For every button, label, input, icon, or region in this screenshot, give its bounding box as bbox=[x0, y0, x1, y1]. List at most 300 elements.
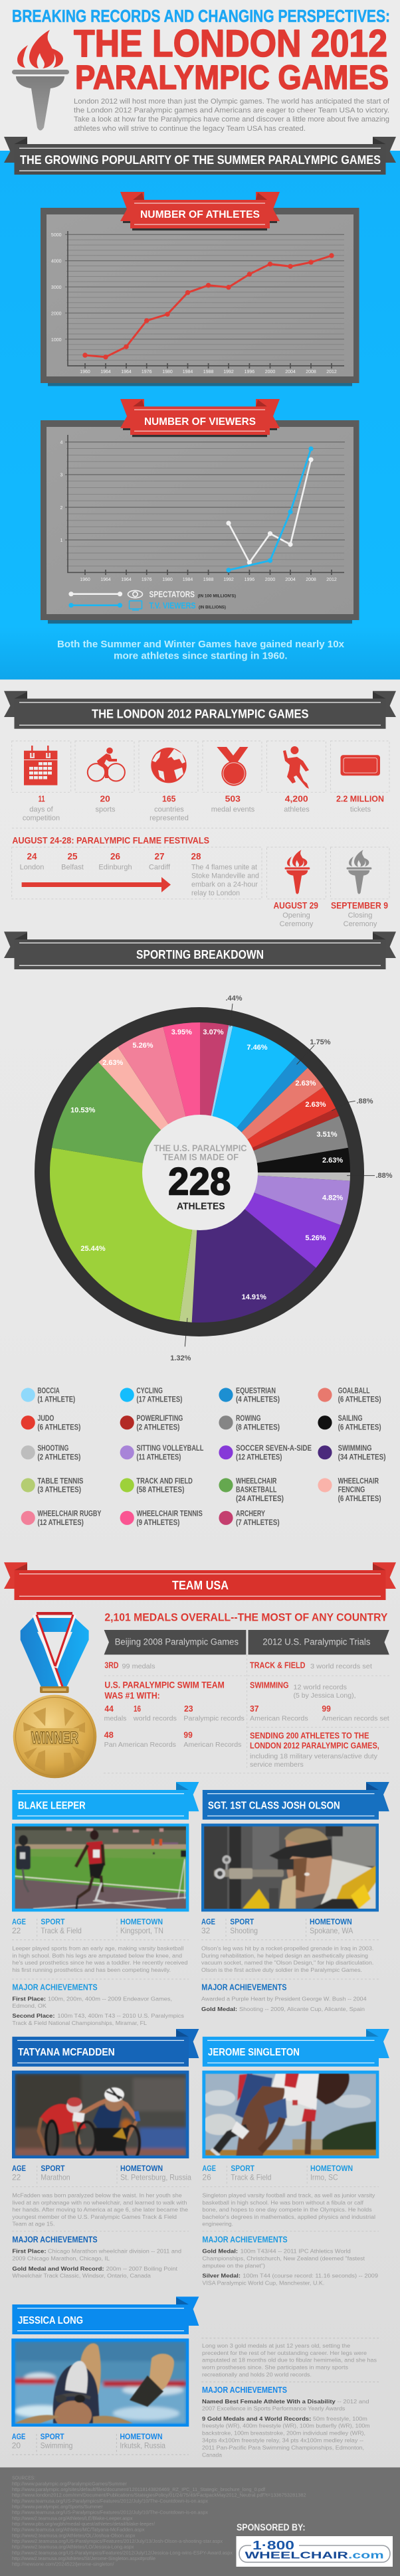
sources bbox=[12, 2475, 306, 2567]
legend labels: (4 ATHLETES) bbox=[236, 1396, 280, 1404]
sources: http://www2.teamusa.org/Athletes/LE/Blake-Leeper.aspx bbox=[12, 2515, 133, 2521]
trials results: 12 world records bbox=[294, 1684, 347, 1691]
growth caption: Both the Summer and Winter Games have gained nearly 10x bbox=[57, 639, 345, 650]
vital stats: Spokane, WA bbox=[310, 1926, 353, 1935]
stat: countries: countries bbox=[154, 806, 184, 814]
icon: gray torch bbox=[347, 850, 371, 894]
biography: Olson's leg was hit by a rocket-propelled grenade in Iraq in 2003. bbox=[201, 1945, 373, 1951]
name ribbon: TATYANA MCFADDEN bbox=[18, 2047, 115, 2058]
trials results: including 18 military veterans/active duty bbox=[250, 1753, 378, 1760]
major achievements: Championships, Christchurch, New Zealand (deemed "fastest bbox=[202, 2255, 365, 2261]
x axis labels: 1976 bbox=[142, 578, 152, 582]
x axis labels: 2012 bbox=[326, 370, 337, 374]
closing ceremony: SEPTEMBER 9 bbox=[331, 900, 388, 910]
biography: recreationally and holds 20 world records. bbox=[202, 2371, 312, 2377]
y axis labels: 5000 bbox=[51, 233, 62, 238]
biography: worn prostheses since. She participates in many sports bbox=[201, 2364, 349, 2370]
opening ceremony bbox=[267, 847, 326, 928]
callouts: 1.32% bbox=[170, 1354, 191, 1362]
biography: bachelor's degrees in mathematics, applied physics and industrial bbox=[202, 2214, 375, 2220]
legend labels: (12 ATHLETES) bbox=[37, 1519, 84, 1527]
vital stats bbox=[12, 2432, 189, 2455]
photo: sprinter on track bbox=[12, 1824, 189, 1913]
spectators line bbox=[226, 457, 314, 565]
legend labels: (1 ATHLETE) bbox=[37, 1396, 75, 1404]
vital stats: HOMETOWN bbox=[120, 2432, 162, 2441]
sponsor logo: .com bbox=[348, 2549, 384, 2561]
y axis labels: 4 bbox=[60, 441, 63, 445]
x axis labels bbox=[80, 370, 337, 374]
vital stats: St. Petersburg, Russia bbox=[120, 2173, 191, 2182]
name ribbon: BLAKE LEEPER bbox=[18, 1801, 86, 1812]
icon: gold medal bbox=[13, 1612, 96, 1778]
major achievements: Silver Medal: bbox=[202, 2273, 241, 2279]
major achievements: Second Place: bbox=[12, 2012, 55, 2019]
stat: countries bbox=[150, 748, 189, 823]
slice percentages: 2.63% bbox=[305, 1101, 326, 1109]
major achievements: VISA Paralympic World Cup, Manchester, U.K. bbox=[202, 2280, 324, 2287]
vital stats: SPORT bbox=[41, 2432, 64, 2441]
legend swatches bbox=[21, 1388, 332, 1525]
flames unite text bbox=[191, 863, 259, 897]
trials results: LONDON 2012 PARALYMPIC GAMES, bbox=[250, 1740, 379, 1750]
legend labels: SAILING bbox=[338, 1415, 363, 1423]
tab: beijing 2008 bbox=[104, 1630, 246, 1654]
festival dates: 27 bbox=[154, 852, 165, 862]
stat: countries: represented bbox=[150, 815, 189, 823]
y axis labels: 2000 bbox=[51, 312, 62, 316]
legend labels: (6 ATHLETES) bbox=[338, 1396, 381, 1404]
trials results: American records set bbox=[322, 1715, 389, 1722]
ribbon heading: team usa: TEAM USA bbox=[172, 1579, 229, 1592]
major achievements: Chicago Marathon wheelchair division -- 2011 and bbox=[48, 2247, 181, 2254]
sources: http://www.paralympic.org/sites/default/files/document/120118143826469_RZ_IPC_11_Stategic_brochure_long_0.pdf bbox=[12, 2486, 265, 2492]
arrow bbox=[22, 877, 171, 892]
legend labels: (8 ATHLETES) bbox=[236, 1423, 280, 1431]
legend: tv viewers bbox=[68, 601, 226, 611]
flame festivals panel bbox=[12, 847, 262, 899]
legend: spectators: (IN 100 MILLION'S) bbox=[198, 594, 236, 599]
sources: http://www.teamusa.org/US-Paralympics/Features/2012/July/10/The-Countdown-is-on.aspx bbox=[12, 2510, 208, 2516]
sponsor logo bbox=[237, 2536, 393, 2567]
stat: sports bbox=[88, 748, 125, 814]
trials results bbox=[250, 1660, 389, 1769]
photo: sprinter at start bbox=[202, 2071, 379, 2158]
ribbon heading: the london 2012 paralympic games bbox=[4, 691, 396, 729]
biography: precedent for the rest of her outstanding career. Her legs were bbox=[202, 2350, 367, 2356]
athlete: tatyana mcfadden bbox=[12, 2029, 199, 2279]
y axis labels: 4000 bbox=[51, 259, 62, 264]
stat: sports: 20 bbox=[100, 793, 110, 803]
vital stats: Track & Field bbox=[41, 1926, 82, 1935]
vital stats: Irkutsk, Russia bbox=[120, 2441, 165, 2450]
stat: medal events: medal events bbox=[211, 806, 255, 814]
trials results: SENDING 200 ATHLETES TO THE bbox=[250, 1731, 369, 1741]
x axis labels: 1988 bbox=[203, 370, 213, 374]
biography: engineering. bbox=[202, 2221, 233, 2227]
biography bbox=[201, 1945, 373, 1973]
major achievements: MAJOR ACHIEVEMENTS bbox=[12, 2235, 98, 2245]
legend labels: EQUESTRIAN bbox=[236, 1387, 276, 1395]
tab: 2012 trials: 2012 U.S. Paralympic Trials bbox=[262, 1637, 371, 1647]
intro text bbox=[74, 98, 389, 133]
biography: he's used prosthetics since he was a toddler. He recently received bbox=[12, 1959, 188, 1966]
icon: ticket bbox=[340, 755, 380, 775]
x axis labels: 1960 bbox=[80, 578, 90, 582]
major achievements: -- 2012 and bbox=[338, 2398, 369, 2405]
major achievements: Wheelchair Track Classic, Windsor, Ontario, Canada bbox=[12, 2273, 151, 2279]
x axis labels: 1964 bbox=[100, 370, 111, 374]
x axis labels: 1992 bbox=[223, 370, 234, 374]
dashed divider bbox=[12, 827, 389, 829]
festival dates: London bbox=[20, 863, 44, 871]
legend labels: (2 ATHLETES) bbox=[136, 1423, 180, 1431]
legend labels: WHEELCHAIR bbox=[338, 1477, 379, 1485]
legend labels: (6 ATHLETES) bbox=[37, 1423, 81, 1431]
callouts: .88% bbox=[356, 1097, 373, 1105]
x axis labels: 1964 bbox=[100, 578, 111, 582]
major achievements: 50m freestyle, 100m bbox=[313, 2415, 367, 2422]
trials results: 3 world records set bbox=[310, 1663, 372, 1670]
biography: bone, and hopes to one day compete in the Olympics. He holds bbox=[202, 2206, 372, 2213]
legend labels: (11 ATHLETES) bbox=[136, 1453, 181, 1461]
name ribbon bbox=[12, 1782, 199, 1820]
legend: spectators bbox=[68, 590, 236, 599]
ribbon heading: team usa bbox=[4, 1562, 396, 1600]
major achievements: MAJOR ACHIEVEMENTS bbox=[202, 2235, 288, 2245]
biography: During rehabilitation, he helped design an aesthetically pleasing bbox=[201, 1952, 368, 1959]
biography: Olson is the first active duty soldier in the Paralympic Games. bbox=[201, 1967, 362, 1973]
legend labels: TABLE TENNIS bbox=[37, 1477, 84, 1485]
biography bbox=[202, 2192, 375, 2227]
beijing results: 44 bbox=[104, 1704, 114, 1714]
center label: THE U.S. PARALYMPIC bbox=[154, 1143, 247, 1153]
legend labels: ROWING bbox=[236, 1415, 261, 1423]
vital stats: 26 bbox=[202, 2173, 211, 2182]
callouts bbox=[170, 995, 393, 1362]
growth caption: more athletes since starting in 1960. bbox=[114, 650, 288, 661]
sources: http://www2.teamusa.org/US-Paralympics/Features/2012/July/12/Jessica-Long-wins-ESPY-Award.aspx bbox=[12, 2549, 233, 2555]
biography: Singleton played varsity football and track, as well as junior varsity bbox=[202, 2192, 375, 2198]
major achievements: Edmond, OK bbox=[12, 2002, 47, 2009]
beijing results bbox=[104, 1660, 245, 1749]
opening ceremony: Ceremony bbox=[280, 920, 314, 928]
major achievements bbox=[202, 2235, 378, 2287]
legend labels: TRACK AND FIELD bbox=[136, 1477, 193, 1485]
festival dates: Belfast bbox=[61, 863, 84, 871]
slice percentages: 10.53% bbox=[70, 1107, 96, 1115]
athlete: blake leeper bbox=[12, 1782, 199, 2026]
beijing results: WAS #1 WITH: bbox=[104, 1690, 160, 1700]
slice percentages: 3.95% bbox=[171, 1028, 192, 1036]
vital stats bbox=[201, 1917, 379, 1979]
sources: http://www2.teamusa.org/Athletes/LO/Jessica-Long.aspx bbox=[12, 2544, 134, 2550]
biography bbox=[12, 2192, 188, 2227]
beijing results: 99 medals bbox=[122, 1663, 155, 1670]
icon: medal bbox=[217, 747, 249, 786]
legend labels: JUDO bbox=[37, 1415, 54, 1423]
major achievements: First Place: bbox=[12, 2247, 47, 2254]
pie chart: sporting breakdown bbox=[35, 995, 393, 1362]
ribbon heading: growing popularity bbox=[4, 137, 396, 175]
vital stats: HOMETOWN bbox=[120, 2164, 163, 2173]
panel: number of athletes chart bbox=[41, 208, 359, 386]
sources: http://www2.teamusa.org/US-Paralympics/Features/2012/July/13/Josh-Olson-a-shooting-star.aspx bbox=[12, 2538, 223, 2544]
festival dates: 28 bbox=[191, 852, 201, 862]
x axis labels: 2000 bbox=[265, 370, 275, 374]
center label bbox=[142, 1115, 258, 1230]
biography: Leeper played sports from an early age, making varsity basketball bbox=[12, 1945, 183, 1951]
major achievements: MAJOR ACHIEVEMENTS bbox=[201, 1983, 287, 1992]
icon: calendar bbox=[24, 746, 57, 785]
major achievements: Gold Medal: bbox=[202, 2247, 238, 2254]
major achievements: MAJOR ACHIEVEMENTS bbox=[202, 2385, 287, 2395]
slice percentages: 3.07% bbox=[203, 1028, 224, 1036]
major achievements: First Place: bbox=[12, 1995, 46, 2002]
stat: athletes: 4,200 bbox=[285, 793, 308, 803]
trials results: 37 bbox=[250, 1704, 259, 1714]
tab: 2012 trials bbox=[249, 1630, 389, 1654]
biography: Team at age 15. bbox=[12, 2221, 54, 2227]
name ribbon bbox=[203, 2029, 389, 2067]
y axis labels: 1 bbox=[60, 538, 63, 543]
dashed dividers bbox=[104, 1654, 389, 1773]
stat: days of competition bbox=[23, 746, 60, 823]
beijing results: 99 bbox=[183, 1730, 193, 1740]
photo: shooter aiming bbox=[201, 1823, 379, 1912]
major achievements: 100m T43/44 -- 2011 IPC Athletics World bbox=[241, 2247, 351, 2254]
legend labels: SITTING VOLLEYBALL bbox=[136, 1445, 203, 1453]
sponsor logo: 1·800 bbox=[252, 2539, 294, 2552]
legend labels: SHOOTING bbox=[37, 1445, 68, 1453]
vital stats: AGE bbox=[12, 2164, 26, 2173]
major achievements: MAJOR ACHIEVEMENTS bbox=[12, 1983, 98, 1992]
trials results: SWIMMING bbox=[250, 1680, 288, 1690]
ribbon: number of athletes: NUMBER OF ATHLETES bbox=[140, 209, 260, 220]
festival dates bbox=[20, 852, 201, 871]
ribbon: number of athletes bbox=[120, 192, 280, 230]
vital stats: SPORT bbox=[230, 1917, 254, 1927]
athlete: josh olson bbox=[201, 1782, 389, 2012]
opening ceremony: AUGUST 29 bbox=[274, 900, 318, 910]
slice percentages: 25.44% bbox=[80, 1245, 106, 1253]
x axis labels: 1992 bbox=[223, 578, 234, 582]
legend labels: WHEELCHAIR bbox=[236, 1477, 277, 1485]
growth caption bbox=[57, 639, 345, 661]
biography: amputated at 18 months old due to fibular hemimelia, and she has bbox=[202, 2357, 377, 2364]
flame festivals heading: AUGUST 24-28: PARALYMPIC FLAME FESTIVALS bbox=[12, 835, 209, 846]
photo: wheelchair racers bbox=[12, 2071, 189, 2160]
athletes line bbox=[82, 253, 334, 359]
major achievements bbox=[12, 2235, 181, 2279]
major achievements: backstroke, 100m breaststroke, 200m individual medley (WR), bbox=[202, 2430, 365, 2437]
biography: lived at an orphanage with no wheelchair, and learned to walk with bbox=[12, 2199, 187, 2206]
major achievements: 200m -- 2007 Boiling Point bbox=[106, 2265, 178, 2272]
icon: torch bbox=[12, 30, 69, 130]
x axis labels: 1988 bbox=[203, 578, 213, 582]
vital stats bbox=[12, 2164, 191, 2231]
opening ceremony: Opening bbox=[282, 912, 310, 920]
icon: cyclist bbox=[88, 748, 125, 781]
biography bbox=[12, 1945, 188, 1973]
beijing results: U.S. PARALYMPIC SWIM TEAM bbox=[104, 1679, 225, 1690]
icon: red torch bbox=[285, 850, 310, 894]
ribbon: number of viewers: NUMBER OF VIEWERS bbox=[144, 416, 256, 428]
y axis labels: 1000 bbox=[51, 338, 62, 343]
x axis labels: 1976 bbox=[142, 370, 152, 374]
vital stats: 22 bbox=[12, 2173, 21, 2182]
slice percentages: 2.63% bbox=[322, 1157, 343, 1165]
slice percentages: 5.26% bbox=[305, 1234, 326, 1242]
vital stats: Marathon bbox=[41, 2173, 70, 2182]
vital stats: Swimming bbox=[41, 2441, 72, 2450]
stat: medal events: 503 bbox=[225, 793, 241, 803]
ribbon: number of viewers bbox=[120, 399, 280, 437]
biography: vacuum socket, named the "Olson Design," for hip disarticulation. bbox=[201, 1959, 373, 1966]
major achievements: 2011 Pan-Pacific Para Swimming Championships, Edmonton, bbox=[202, 2444, 364, 2451]
legend labels: GOALBALL bbox=[338, 1387, 370, 1395]
legend labels: BOCCIA bbox=[37, 1387, 60, 1395]
legend labels: SOCCER SEVEN-A-SIDE bbox=[236, 1445, 312, 1453]
ribbon heading: sporting breakdown: SPORTING BREAKDOWN bbox=[136, 948, 264, 961]
beijing results: Pan American Records bbox=[104, 1741, 176, 1749]
sources: http://www.teamusa.org/Athletes/MC/Tatyana-McFadden.aspx bbox=[12, 2527, 145, 2533]
flames unite text: embark on a 24-hour bbox=[191, 881, 258, 889]
x axis labels: 1964 bbox=[121, 370, 132, 374]
intro text: the London 2012 Paralympic games and Americans are eager to cheer Team USA to victory. bbox=[74, 106, 389, 114]
slice percentages: 3.51% bbox=[316, 1131, 338, 1139]
name ribbon: JEROME SINGLETON bbox=[208, 2047, 300, 2058]
legend labels: (3 ATHLETES) bbox=[37, 1487, 81, 1494]
x axis labels: 1996 bbox=[245, 370, 254, 374]
major achievements: Shooting -- 2009, Alicante Cup, Alicante, Spain bbox=[239, 2006, 365, 2012]
sources: http://www.paralympic.org/ParalympicGames/Summer bbox=[12, 2480, 127, 2486]
legend labels: (6 ATHLETES) bbox=[338, 1423, 381, 1431]
dashed stat boxes bbox=[12, 741, 389, 792]
y axis labels: 2 bbox=[60, 506, 63, 511]
slice percentages: 7.46% bbox=[247, 1044, 268, 1052]
flames unite text: relay to London bbox=[191, 889, 240, 897]
festival dates: Edinburgh bbox=[98, 863, 132, 871]
festival dates: 24 bbox=[27, 852, 37, 862]
trials results: (5 by Jessica Long), bbox=[294, 1692, 356, 1700]
legend labels: CYCLING bbox=[136, 1387, 163, 1395]
legend labels: POWERLIFTING bbox=[136, 1415, 183, 1423]
biography: in high school. Both his legs are amputated below the knee, and bbox=[12, 1952, 182, 1959]
vital stats bbox=[202, 2164, 379, 2231]
sources: http://newsone.com/2024522/jerome-singleton/ bbox=[12, 2561, 114, 2567]
name ribbon bbox=[12, 2029, 199, 2067]
beijing results: 3RD bbox=[104, 1660, 118, 1670]
center label: ATHLETES bbox=[177, 1201, 225, 1212]
beijing results: American Records bbox=[183, 1741, 242, 1749]
vital stats: AGE bbox=[12, 1917, 26, 1927]
legend: sports bbox=[21, 1387, 386, 1527]
beijing results: 16 bbox=[134, 1704, 141, 1714]
slice percentages: 2.63% bbox=[102, 1059, 124, 1067]
callouts: .44% bbox=[225, 995, 243, 1003]
legend labels: (17 ATHLETES) bbox=[136, 1396, 183, 1404]
biography: McFadden was born paralyzed below the waist. In her youth she bbox=[12, 2192, 182, 2198]
flames unite text: The 4 flames unite at bbox=[191, 863, 257, 871]
intro text: athletes who will strive to continue the legacy Team USA has created. bbox=[74, 125, 306, 133]
y axis labels bbox=[51, 233, 62, 343]
header bbox=[12, 6, 390, 133]
sources: http://www.teamusa.org/US-Paralympics/Features/2012/July/10/The-Countdown-is-on.aspx bbox=[12, 2498, 208, 2504]
biography: her hands. After moving to America at age 6, she later became the bbox=[12, 2206, 188, 2213]
center label: 228 bbox=[168, 1160, 231, 1203]
legend: tv viewers: (IN BILLIONS) bbox=[199, 605, 226, 609]
x axis labels: 1964 bbox=[121, 578, 132, 582]
x axis labels: 2004 bbox=[285, 578, 296, 582]
legend labels: (12 ATHLETES) bbox=[236, 1453, 282, 1461]
name ribbon: JESSICA LONG bbox=[18, 2315, 83, 2326]
x axis labels: 1980 bbox=[162, 370, 173, 374]
legend labels: (7 ATHLETES) bbox=[236, 1519, 280, 1527]
trials results: 99 bbox=[322, 1704, 331, 1714]
stat: days of competition: 11 bbox=[39, 793, 45, 803]
footer bbox=[0, 2467, 400, 2576]
festival dates: 25 bbox=[67, 852, 78, 862]
vital stats: Irmo, SC bbox=[310, 2173, 338, 2182]
biography: youngest member of the U.S. Paralympic Games Track & Field bbox=[12, 2214, 177, 2220]
major achievements: 100m T43, 400m T43 -- 2010 U.S. Paralympics bbox=[57, 2012, 185, 2019]
sponsor logo: WHEELCHAIR bbox=[245, 2549, 348, 2561]
stat: tickets: 2.2 MILLION bbox=[336, 793, 384, 803]
major achievements: 100m T44 (course record: 11.16 seconds) -- 2009 bbox=[243, 2273, 378, 2279]
slice percentages: 2.63% bbox=[295, 1080, 316, 1087]
legend labels: BASKETBALL bbox=[236, 1487, 276, 1494]
beijing results: world records bbox=[133, 1715, 177, 1722]
vital stats: 20 bbox=[12, 2441, 21, 2450]
vital stats: 32 bbox=[201, 1926, 211, 1935]
stat: days of competition: competition bbox=[23, 815, 60, 823]
x axis labels: 1984 bbox=[183, 578, 193, 582]
major achievements: 34pts 4x100m freestyle relay, 34 pts 4x100m medley relay -- bbox=[202, 2437, 363, 2443]
icon: globe bbox=[151, 748, 187, 783]
blue section background bbox=[0, 151, 400, 680]
stat: sports: sports bbox=[96, 806, 116, 814]
athlete: jerome singleton bbox=[202, 2029, 389, 2287]
name ribbon bbox=[203, 1782, 389, 1820]
legend labels: (24 ATHLETES) bbox=[236, 1495, 284, 1503]
slice percentages bbox=[70, 1028, 343, 1301]
x axis labels: 2012 bbox=[326, 578, 337, 582]
sources: SOURCES: bbox=[12, 2475, 35, 2481]
major achievements: Named Best Female Athlete With a Disability bbox=[202, 2398, 336, 2405]
vital stats: HOMETOWN bbox=[310, 2164, 353, 2173]
major achievements: 100m, 200m, 400m -- 2009 Endeavor Games, bbox=[48, 1995, 172, 2002]
stat: athletes: athletes bbox=[284, 806, 310, 814]
closing ceremony bbox=[331, 847, 389, 928]
stat: countries: 165 bbox=[162, 793, 175, 803]
panel: number of viewers chart bbox=[41, 420, 359, 623]
sources: http://www.london2012.com/mm/Document/Publications/StategiesPolicy/01/24/75/49/FactpackMay2012_Neutral.pdf?t=1336753281382 bbox=[12, 2492, 306, 2498]
stat: days of competition: days of bbox=[29, 806, 54, 814]
tv viewers line bbox=[226, 446, 314, 572]
trials results: TRACK & FIELD bbox=[250, 1660, 306, 1670]
sources: http://www2.teamusa.org/Athletes/SI/Jerome-Singleton.aspx#profile bbox=[12, 2555, 155, 2561]
legend labels bbox=[37, 1387, 386, 1527]
icon: amputee runner bbox=[283, 746, 309, 789]
major achievements: 2007 Excellence in Sports Performance Yearly Awards bbox=[202, 2405, 346, 2412]
legend: tv viewers: T.V. VIEWERS bbox=[149, 602, 195, 611]
biography: basketball in high school. He was born without a fibula or calf bbox=[202, 2199, 364, 2206]
legend labels: ARCHERY bbox=[236, 1510, 265, 1518]
sources: http://www2.teamusa.org/Athletes/OL/Joshua-Olson.aspx bbox=[12, 2532, 136, 2538]
y axis labels: 3 bbox=[60, 473, 63, 478]
x axis labels bbox=[80, 578, 337, 582]
